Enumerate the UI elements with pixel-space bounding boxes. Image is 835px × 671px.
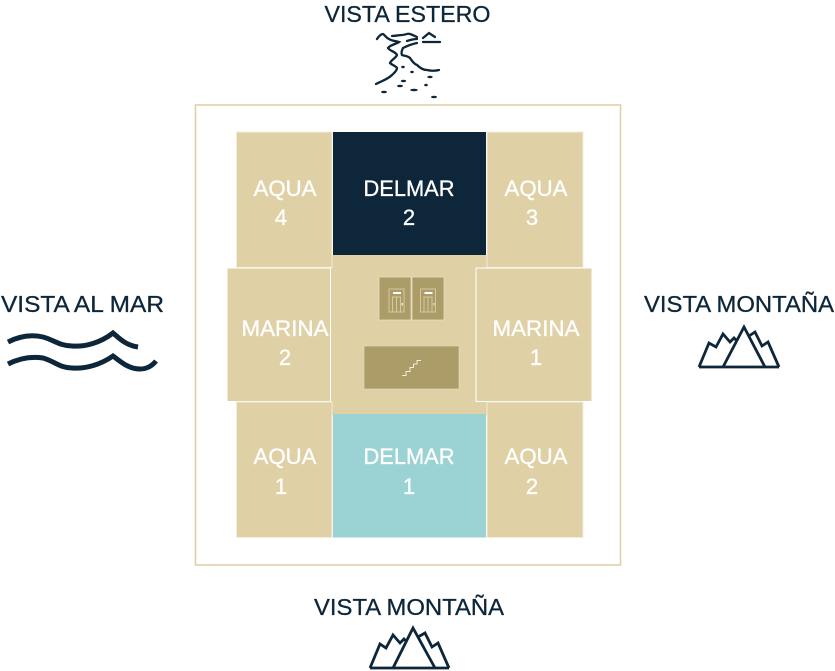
unit: Aqua 2: 2: [526, 474, 538, 499]
unit: Aqua 4: AQUA: [254, 176, 317, 201]
floor plan: [227, 132, 592, 538]
floor plan frame: [196, 105, 620, 565]
unit: Delmar 1: 1: [403, 474, 415, 499]
unit: Delmar 2: [333, 132, 486, 255]
unit: Delmar 1: DELMAR: [364, 444, 454, 469]
unit: Aqua 1: [236, 402, 332, 538]
heading: Vista Montaña bottom: VISTA MONTAÑA: [314, 594, 505, 620]
unit: Delmar 2: 2: [403, 205, 415, 230]
icon: waves: [8, 333, 156, 369]
unit: Aqua 2: [487, 402, 583, 538]
icon: stairs: [364, 346, 459, 389]
unit: Marina 2: 2: [279, 345, 291, 370]
unit: Aqua 4: [236, 132, 332, 268]
unit: Aqua 2: AQUA: [504, 444, 568, 469]
unit: Aqua 4: 4: [275, 205, 287, 230]
unit: Marina 1: MARINA: [492, 316, 580, 341]
unit: Aqua 3: [487, 132, 583, 268]
central core: [331, 255, 487, 415]
icon: estuary: [376, 33, 440, 98]
heading: Vista Estero: VISTA ESTERO: [324, 1, 490, 27]
unit: Marina 2: MARINA: [242, 316, 329, 341]
unit: Aqua 1: AQUA: [254, 444, 317, 469]
heading: Vista al Mar: VISTA AL MAR: [1, 291, 164, 317]
icon: mountains bottom: [370, 628, 449, 668]
unit: Aqua 3: AQUA: [504, 176, 568, 201]
unit: Aqua 3: 3: [526, 205, 538, 230]
unit: Marina 1: 1: [530, 345, 542, 370]
icon: elevators: [379, 277, 444, 320]
unit: Delmar 2: DELMAR: [364, 176, 454, 201]
unit: Marina 1: [476, 268, 592, 402]
unit: Marina 2: [227, 268, 330, 402]
unit: Aqua 1: 1: [275, 474, 287, 499]
heading: Vista Montaña right: VISTA MONTAÑA: [644, 291, 835, 317]
icon: mountains right: [699, 327, 779, 367]
unit: Delmar 1: [333, 414, 486, 538]
